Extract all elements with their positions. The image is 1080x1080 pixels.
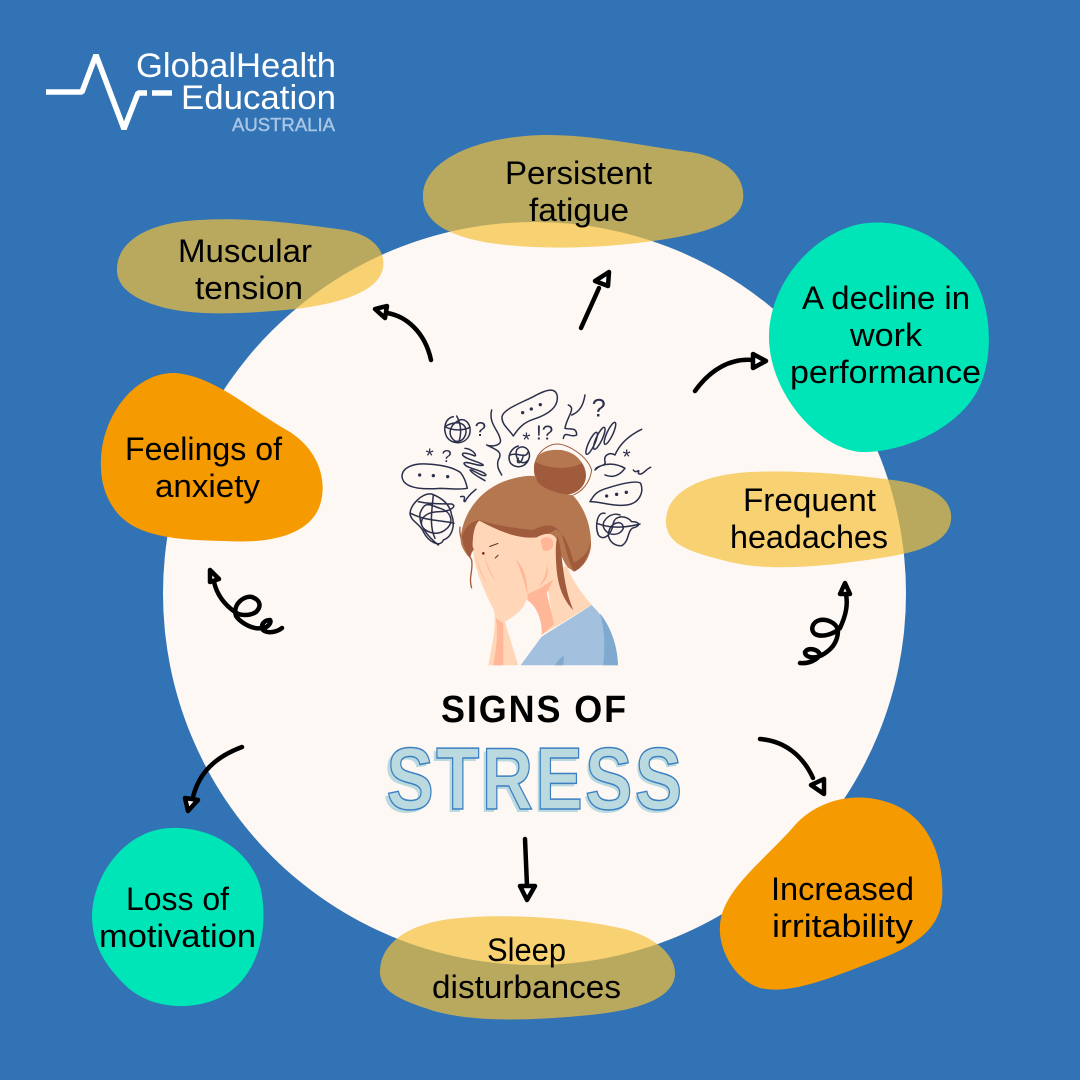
central circle panel	[163, 222, 906, 965]
blob: decline in work performance: performance	[790, 354, 981, 390]
blob: muscular tension: Muscular	[178, 233, 312, 269]
logo subtitle: AUSTRALIA	[232, 115, 335, 135]
arrow: to sleep disturbances	[520, 839, 535, 900]
closed eye marks	[482, 543, 498, 558]
question and exclamation marks: ?	[475, 418, 486, 441]
scribble thought doodles	[402, 390, 651, 546]
face	[473, 521, 562, 593]
blob: loss of motivation: Loss of	[126, 881, 229, 917]
scribble thought doodles: *	[623, 445, 631, 468]
blob: feelings of anxiety	[101, 373, 323, 542]
hand shadows	[476, 555, 548, 665]
icon: heartbeat line	[46, 55, 172, 129]
arrow: to muscular tension	[375, 306, 431, 360]
blob: frequent headaches: Frequent	[743, 482, 876, 518]
arrow: to persistent fatigue	[581, 272, 609, 328]
hair shadow band	[462, 520, 591, 572]
scribble thought doodles: ?	[592, 395, 606, 423]
title: stress: STRESS	[386, 729, 684, 828]
blob: muscular tension: tension	[195, 270, 303, 306]
logo name: GlobalHealth	[136, 47, 336, 85]
blob: persistent fatigue: Persistent	[505, 155, 652, 191]
blob: increased irritability: Increased	[771, 871, 914, 907]
loose hair strand	[556, 537, 573, 610]
blob: decline in work performance: work	[849, 317, 923, 353]
hair wisps and bun	[460, 444, 592, 588]
arrow: to frequent headaches	[800, 583, 850, 663]
blob: increased irritability: irritability	[772, 908, 913, 944]
blob: sleep disturbances: disturbances	[432, 969, 621, 1005]
logo name: Education	[181, 79, 336, 117]
scribble thought doodles: *	[522, 429, 530, 452]
blob: frequent headaches: headaches	[730, 519, 888, 555]
arrow: to loss of motivation	[185, 747, 242, 811]
blob: decline in work performance	[769, 222, 989, 452]
blob: increased irritability	[720, 798, 942, 990]
arrow: to work performance	[695, 354, 766, 391]
blob: persistent fatigue: fatigue	[529, 192, 629, 228]
ear	[541, 537, 553, 551]
blob: feelings of anxiety: Feelings of	[125, 431, 282, 467]
scribble thought doodles: !?	[536, 421, 553, 444]
blob: feelings of anxiety: anxiety	[155, 468, 260, 504]
blob: loss of motivation: motivation	[99, 918, 256, 954]
blob: loss of motivation	[92, 828, 263, 1006]
blob: persistent fatigue	[423, 135, 743, 248]
title: signs of: SIGNS OF	[441, 689, 628, 731]
logo name	[136, 47, 336, 117]
hair	[461, 476, 591, 572]
arrow: to increased irritability	[760, 739, 824, 794]
blob: muscular tension	[117, 219, 383, 313]
neck	[542, 565, 592, 635]
blob: frequent headaches	[666, 471, 951, 567]
neck shadow	[527, 580, 554, 635]
logo	[46, 47, 336, 135]
blob: decline in work performance: A decline in	[802, 280, 970, 316]
scribble thought doodles: *	[426, 445, 434, 468]
arrow: to feelings of anxiety	[210, 570, 282, 632]
blob: sleep disturbances: Sleep	[487, 932, 566, 968]
title: stress: STRESS	[383, 732, 683, 831]
shirt	[521, 605, 618, 665]
scribble thought doodles: ?	[442, 446, 452, 466]
illustration: stressed woman	[402, 390, 651, 665]
blob: sleep disturbances	[380, 916, 675, 1019]
hand and arm	[473, 543, 527, 665]
